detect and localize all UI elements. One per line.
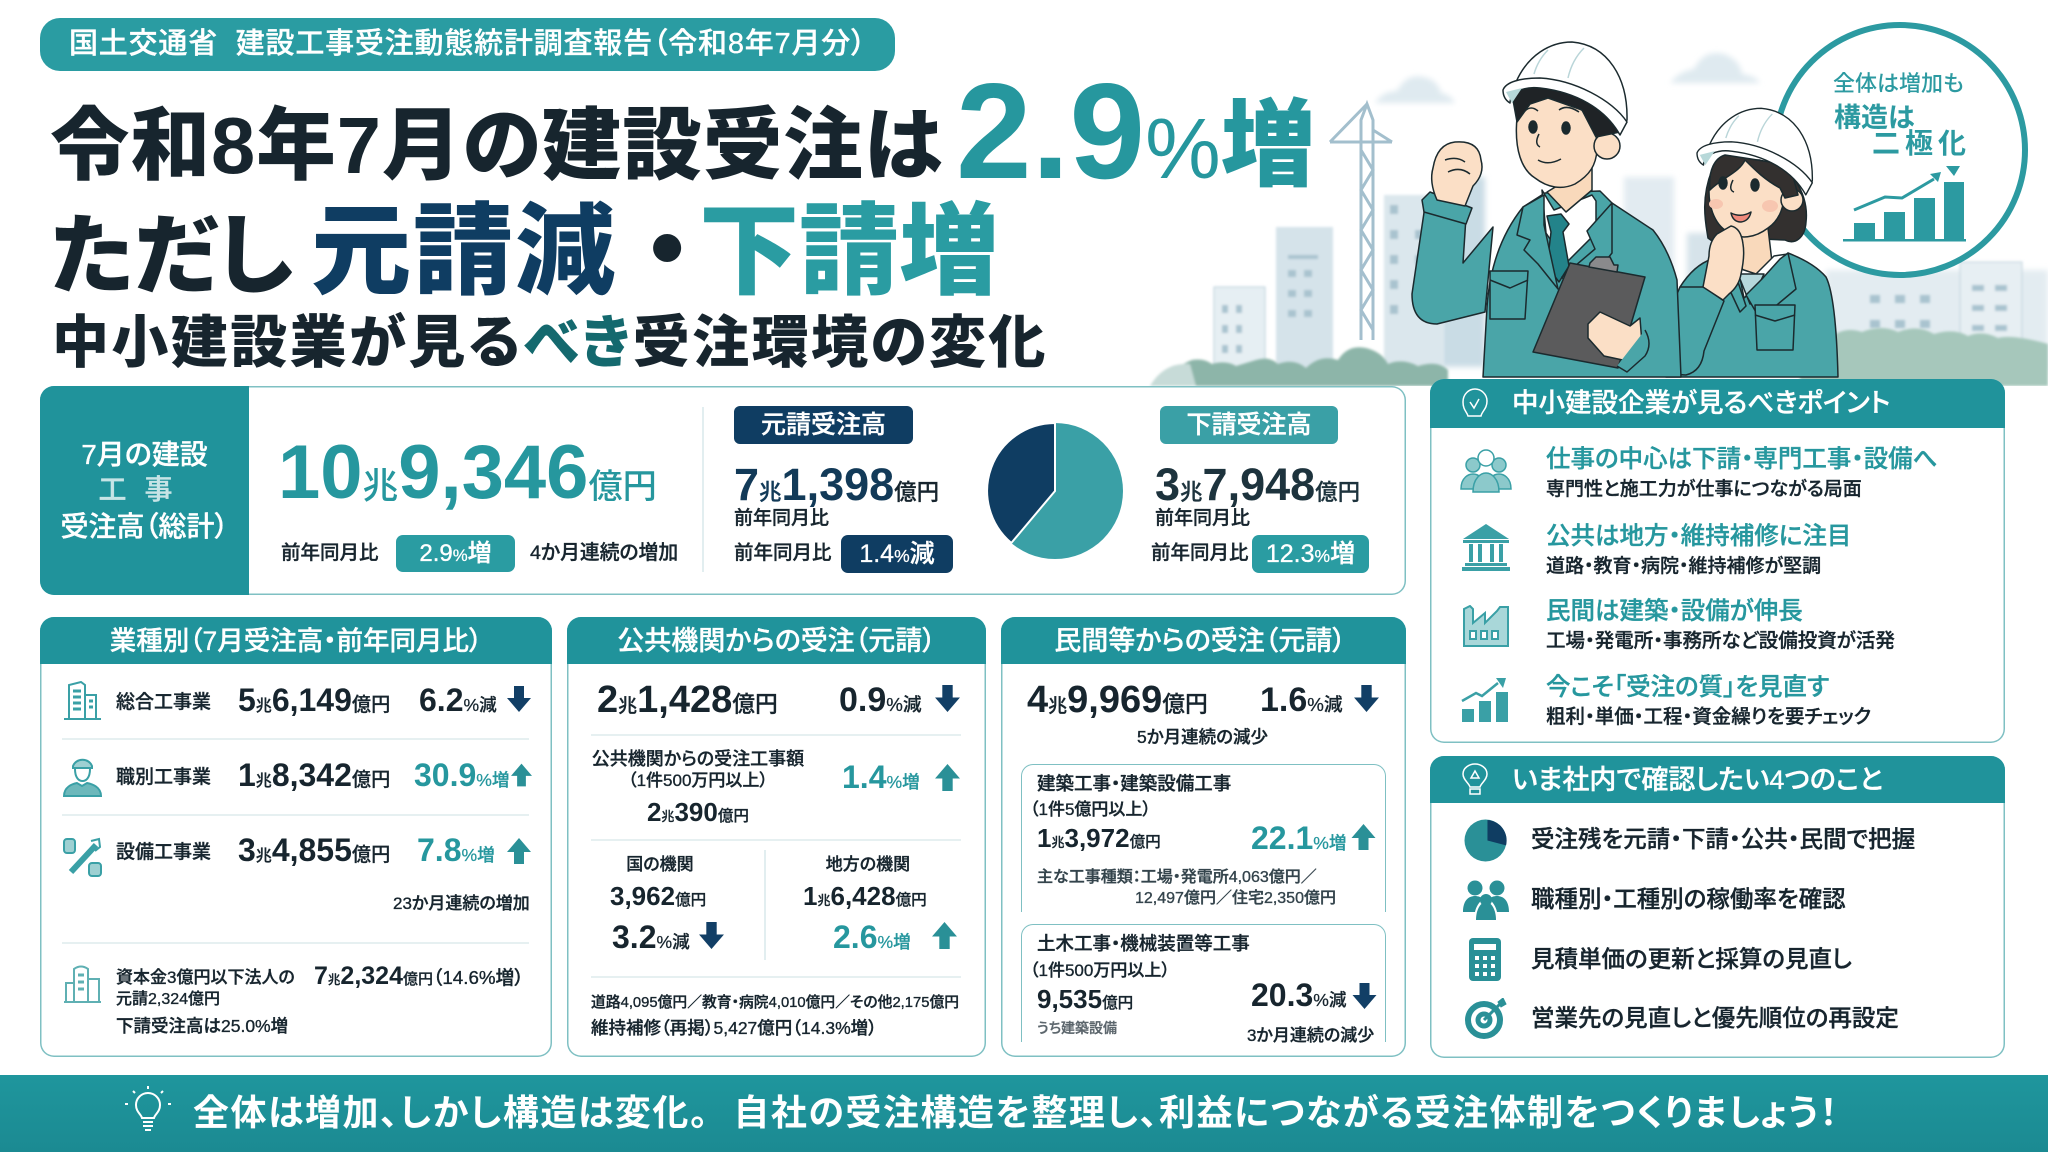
panel heading [40, 617, 552, 664]
check 2: 職種別・工種別の稼働率を確認 [1531, 886, 1846, 912]
sub yoy label: 前年同月比 [1151, 542, 1249, 564]
icon: people [1460, 449, 1512, 493]
headline figure: 2.9%増 [956, 55, 1316, 207]
closing message: 全体は増加、しかし構造は変化。 自社の受注構造を整理し、利益につながる受注体制をつくりましょう！ [193, 1092, 1839, 1133]
card: building work [1021, 764, 1386, 912]
card: building work: 1兆3,972億円 [1037, 823, 1161, 853]
panel heading: 中小建設企業が見るべきポイント [1512, 388, 1890, 418]
callout circle: 二極化 [1872, 128, 1971, 159]
arrow up [507, 838, 531, 864]
panel heading [1430, 379, 2005, 428]
point 4: 今こそ「受注の質」を見直す [1546, 674, 1829, 701]
row value: 1兆8,342億円 [238, 757, 390, 793]
local agencies [803, 855, 957, 955]
panel: key points [1430, 379, 2005, 743]
icon: light bulb [125, 1086, 171, 1136]
sub yoy badge: 12.3%増 [1266, 540, 1355, 568]
check 4 [1464, 998, 1964, 1040]
prime yoy badge [841, 535, 953, 573]
panel: private orders [1001, 617, 1406, 1057]
card: civil work: （1件500万円以上） [1030, 961, 1170, 980]
sub contract value: 3兆7,948億円 [1155, 459, 1360, 510]
point 1 [1460, 446, 1937, 500]
total label block: 工事 [98, 474, 190, 505]
card: building work: （1件5億円以上） [1030, 800, 1151, 819]
panel heading: 業種別（7月受注高・前年同月比） [110, 626, 482, 656]
total label block [40, 386, 249, 595]
private value: 4兆9,969億円 [1027, 679, 1208, 721]
card: building work: 12,497億円／住宅2,350億円 [1135, 890, 1336, 907]
total yoy badge [396, 535, 515, 572]
panel heading: 民間等からの受注（元請） [1054, 626, 1346, 656]
point 1: 仕事の中心は下請・専門工事・設備へ [1546, 446, 1937, 473]
icon: target [1464, 998, 1507, 1040]
arrow up [935, 764, 960, 791]
contract value block: 公共機関からの受注工事額 [592, 749, 804, 769]
check 4: 営業先の見直しと優先順位の再設定 [1531, 1005, 1899, 1031]
row change: 30.9%増 [414, 757, 510, 793]
sub note: 前年同月比 [1155, 508, 1250, 529]
icon: bulb [1462, 763, 1488, 795]
contract value block: 2兆390億円 [647, 797, 749, 827]
icon: worker [63, 758, 102, 797]
point 2: 公共は地方・維持補修に注目 [1546, 523, 1851, 550]
card: civil work: 3か月連続の減少 [1247, 1026, 1374, 1045]
panel heading: 公共機関からの受注（元請） [617, 626, 936, 656]
sub contract label [1160, 406, 1338, 444]
arrow up [511, 764, 532, 786]
point 4: 粗利・単価・工程・資金繰りを要チェック [1546, 706, 1871, 728]
row value: 5兆6,149億円 [238, 682, 390, 718]
icon: pie [1464, 819, 1507, 862]
crane [1330, 104, 1392, 340]
subcontract note: 下請受注高は25.0%増 [116, 1016, 288, 1036]
arrow down [935, 685, 960, 712]
row label: 総合工事業 [116, 692, 211, 713]
row change: 6.2%減 [419, 682, 497, 718]
icon: calculator [1469, 938, 1501, 981]
prime contract label [734, 406, 913, 444]
row label: 設備工事業 [116, 842, 211, 863]
subtitle: 中小建設業が見るべき受注環境の変化 [52, 311, 1048, 375]
capital value: 7兆2,324億円（14.6%増） [314, 962, 524, 990]
title [50, 55, 1316, 375]
card: building work: 22.1%増 [1251, 820, 1347, 856]
capital subnote: 元請2,324億円 [116, 991, 220, 1008]
check 1 [1464, 819, 1964, 862]
card: building work: 建築工事・建築設備工事 [1037, 773, 1231, 794]
prime contract label: 元請受注高 [761, 411, 886, 439]
footer banner [0, 1075, 2048, 1152]
point 2: 道路・教育・病院・維持補修が堅調 [1546, 556, 1821, 577]
panel heading [1430, 756, 2005, 803]
national agencies: 3,962億円 [610, 881, 706, 911]
arrow down [507, 686, 531, 712]
panel: by trade [40, 617, 552, 1057]
callout circle [1775, 25, 2025, 275]
row change: 7.8%増 [417, 832, 495, 868]
point 4 [1460, 673, 1960, 731]
panel: headline stats [40, 386, 1406, 595]
sub yoy badge [1252, 535, 1369, 573]
panel heading [1001, 617, 1406, 664]
check 3 [1464, 938, 1964, 981]
local agencies: 地方の機関 [826, 855, 910, 874]
prime yoy label: 前年同月比 [734, 542, 832, 564]
public change: 0.9%減 [839, 681, 922, 719]
point 3: 工場・発電所・事務所など設備投資が活発 [1546, 630, 1895, 652]
point 1: 専門性と施工力が仕事につながる局面 [1546, 479, 1862, 500]
icon: team [1463, 880, 1509, 920]
point 3 [1463, 598, 1895, 652]
streak note: 23か月連続の増加 [393, 894, 530, 913]
panel: internal checks [1430, 756, 2005, 1058]
national agencies [610, 855, 724, 955]
prime contract value: 7兆1,398億円 [734, 459, 939, 510]
point 3: 民間は建築・設備が伸長 [1546, 598, 1803, 625]
total value: 10兆9,346億円 [278, 430, 657, 515]
local agencies: 2.6%増 [833, 919, 911, 955]
streak note: 4か月連続の増加 [530, 542, 678, 564]
local agencies: 1兆6,428億円 [803, 881, 927, 911]
card: civil work: 20.3%減 [1251, 977, 1347, 1013]
panel heading: いま社内で確認したい4つのこと [1512, 765, 1883, 795]
breakdown note: 道路4,095億円／教育・病院4,010億円／その他2,175億円 [591, 995, 959, 1011]
contract value block [592, 749, 804, 827]
public value: 2兆1,428億円 [597, 679, 778, 721]
maintenance note: 維持補修（再掲）5,427億円（14.3%増） [591, 1018, 877, 1038]
private change: 1.6%減 [1260, 681, 1343, 719]
trees [1150, 328, 2048, 386]
prime yoy badge: 1.4%減 [859, 540, 935, 568]
icon: growth chart [1460, 677, 1510, 723]
icon: public building [1462, 524, 1510, 571]
top label pill [40, 18, 895, 71]
total yoy badge: 2.9%増 [419, 540, 492, 567]
check 2 [1464, 880, 1964, 920]
title line 1: 令和8年7月の建設受注は [50, 101, 943, 190]
callout circle: 構造は [1834, 103, 1915, 133]
title line 2: ただし元請減・下請増 [50, 196, 999, 308]
icon: small buildings [64, 966, 101, 1003]
icon: tools [63, 838, 102, 877]
card: civil work: 土木工事・機械装置等工事 [1037, 933, 1250, 954]
illustration: city skyline, crane and two workers [1150, 22, 2048, 386]
total yoy: 前年同月比 [281, 542, 379, 564]
icon: bulb head [1462, 388, 1488, 417]
prime note: 前年同月比 [734, 508, 829, 529]
pie chart: prime vs sub [988, 423, 1123, 559]
capital note: 資本金3億円以下法人の [116, 968, 295, 987]
top label pill: 国土交通省 建設工事受注動態統計調査報告（令和8年7月分） [69, 28, 866, 60]
row label: 職別工事業 [116, 767, 211, 788]
national agencies: 国の機関 [626, 855, 694, 874]
streak note: 5か月連続の減少 [1137, 727, 1268, 747]
contract change: 1.4%増 [842, 759, 920, 795]
point 2 [1462, 522, 1851, 577]
icon: office building [64, 681, 101, 720]
national agencies: 3.2%減 [612, 919, 690, 955]
man worker [1412, 42, 1681, 377]
total label block: 受注高（総計） [60, 511, 228, 542]
card: civil work: 9,535億円 [1037, 984, 1133, 1014]
woman worker [1665, 108, 1838, 377]
arrow down [1354, 685, 1379, 712]
check 3: 見積単価の更新と採算の見直し [1531, 946, 1852, 972]
total label block: 7月の建設 [81, 439, 208, 470]
row value: 3兆4,855億円 [238, 832, 390, 868]
contract value block: （1件500万円以上） [628, 771, 768, 790]
card: civil work: うち建築設備 [1037, 1020, 1117, 1036]
sub contract label: 下請受注高 [1186, 411, 1312, 439]
panel: public orders [567, 617, 986, 1057]
card: civil work [1021, 924, 1386, 1042]
check 1: 受注残を元請・下請・公共・民間で把握 [1531, 826, 1915, 852]
card: building work: 主な工事種類：工場・発電所4,063億円／ [1037, 869, 1317, 886]
callout circle: 全体は増加も [1833, 71, 1964, 96]
icon: factory [1463, 605, 1509, 647]
panel heading [567, 617, 986, 664]
